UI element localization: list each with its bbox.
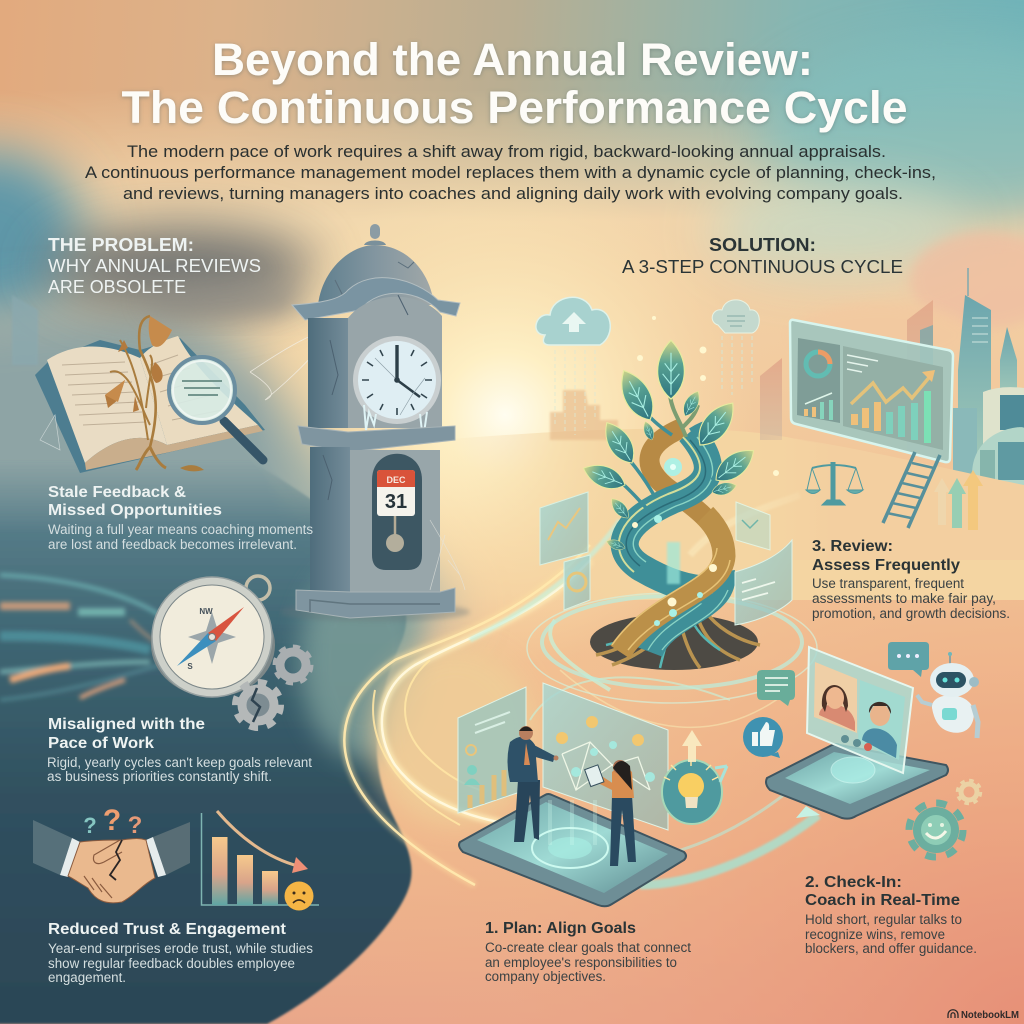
- step 1: plan: Co-create clear goals that connect: [485, 940, 691, 955]
- icon: thumbs up bubble: [743, 717, 783, 758]
- problem 1: stale feedback: Waiting a full year means coaching moments: [48, 522, 313, 537]
- icon: compass with gears: NW: [199, 607, 213, 616]
- step 2: check-in: blockers, and offer guidance.: [805, 941, 977, 956]
- step 1: plan: [485, 920, 691, 984]
- step 3: review: Assess Frequently: [812, 557, 960, 574]
- step 2: check-in: [805, 874, 977, 956]
- flowing glow swirl: [344, 495, 818, 885]
- city skyline: left: [550, 390, 618, 440]
- heading: solution: SOLUTION:: [709, 235, 816, 255]
- icon: smiling gear: [909, 803, 963, 857]
- icon: open book with wilted plant and magnifying glass: [35, 316, 265, 473]
- icon: chat bubble: [757, 670, 795, 706]
- problem 2: misaligned: Misaligned with the: [48, 716, 205, 733]
- left faded skyscraper: [12, 295, 38, 365]
- step 3: review: assessments to make fair pay,: [812, 591, 996, 606]
- icon: broken handshake with question marks: ?: [128, 812, 142, 839]
- problem 1: stale feedback: are lost and feedback becomes irrelevant.: [48, 537, 297, 552]
- floating panels around tree: [540, 492, 792, 625]
- problem 1: stale feedback: Stale Feedback &: [48, 484, 186, 501]
- heading: the problem: THE PROBLEM:: [48, 235, 194, 255]
- icon: cracked grandfather clock: [250, 224, 470, 622]
- problem 3: reduced trust: Reduced Trust & Engagement: [48, 921, 287, 938]
- heading: the problem: [48, 235, 261, 297]
- icon: robot assistant: [917, 652, 979, 738]
- step 3: review: Use transparent, frequent: [812, 576, 964, 591]
- title: Beyond the Annual Review:: [212, 34, 813, 85]
- heading: the problem: WHY ANNUAL REVIEWS: [48, 256, 261, 276]
- city skyline: right: [745, 232, 1024, 560]
- declining bar chart with sad face: [202, 811, 319, 910]
- icon: growth arrows: [934, 470, 983, 530]
- icon: lightbulb badge: [662, 730, 727, 824]
- step 2: check-in: 2. Check-In:: [805, 874, 902, 891]
- step 1: plan: company objectives.: [485, 969, 606, 984]
- heading: solution: [622, 235, 903, 277]
- icon: broken handshake with question marks: ?: [83, 813, 97, 838]
- problem 3: reduced trust: engagement.: [48, 970, 126, 985]
- intro paragraph: [85, 142, 936, 203]
- step 3: review: 3. Review:: [812, 538, 893, 555]
- speed streaks: [0, 575, 170, 700]
- step 3: review: [812, 538, 1010, 621]
- NotebookLM mark: NotebookLM: [961, 1009, 1019, 1021]
- problem 3: reduced trust: Year-end surprises erode trust, while studies: [48, 941, 313, 956]
- icon: cloud upload: [536, 297, 610, 435]
- title: [122, 34, 908, 133]
- step 2: check-in: Hold short, regular talks to: [805, 912, 962, 927]
- intro paragraph: The modern pace of work requires a shift away from rigid, backward-looking annual appraisals.: [127, 142, 886, 161]
- problem 2: misaligned: Rigid, yearly cycles can't keep goals relevant: [47, 755, 312, 770]
- icon: compass with gears: [151, 576, 311, 728]
- icon: cracked grandfather clock: DEC: [386, 475, 406, 485]
- icon: cracked grandfather clock: 31: [385, 491, 407, 513]
- problem 2: misaligned: Pace of Work: [48, 735, 154, 752]
- icon: analytics dashboard: [790, 320, 953, 462]
- problem 2: misaligned: [47, 716, 312, 784]
- icon: balance scale: [806, 462, 863, 505]
- icon: cloud data: [712, 300, 759, 395]
- icon: tan gear: [958, 780, 980, 804]
- icon: broken handshake with question marks: [33, 804, 190, 903]
- problem 1: stale feedback: [48, 484, 313, 552]
- icon: small chat bubble: [888, 642, 929, 677]
- icon: check-in tablet with video call: [766, 647, 948, 819]
- icon: plan tablet with screens and people: [458, 683, 686, 906]
- icon: compass with gears: S: [187, 662, 193, 671]
- problem 3: reduced trust: show regular feedback doubles employee: [48, 956, 295, 971]
- step 2: check-in: recognize wins, remove: [805, 927, 945, 942]
- title: The Continuous Performance Cycle: [122, 82, 908, 133]
- problem 1: stale feedback: Missed Opportunities: [48, 502, 222, 519]
- icon: ladder: [883, 452, 940, 528]
- step 2: check-in: Coach in Real-Time: [805, 892, 960, 909]
- problem 2: misaligned: as business priorities constantly shift.: [47, 769, 272, 784]
- step 1: plan: 1. Plan: Align Goals: [485, 920, 636, 937]
- intro paragraph: and reviews, turning managers into coaches and aligning daily work with evolving company goals.: [123, 184, 903, 203]
- intro paragraph: A continuous performance management model replaces them with a dynamic cycle of planning, check-ins,: [85, 163, 936, 182]
- step 3: review: promotion, and growth decisions.: [812, 606, 1010, 621]
- step 1: plan: an employee's responsibilities to: [485, 955, 677, 970]
- heading: the problem: ARE OBSOLETE: [48, 277, 186, 297]
- icon: broken handshake with question marks: ?: [103, 804, 121, 837]
- icon: growing intertwined tree: [580, 316, 779, 670]
- orbit rings around tree: [527, 593, 817, 703]
- heading: solution: A 3-STEP CONTINUOUS CYCLE: [622, 257, 903, 277]
- problem 3: reduced trust: [48, 921, 313, 985]
